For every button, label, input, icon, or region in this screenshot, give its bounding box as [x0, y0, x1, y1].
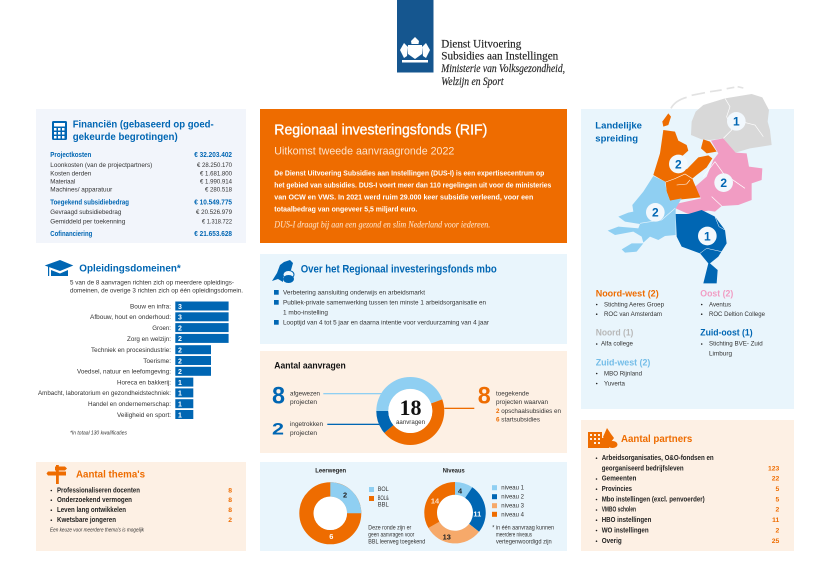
heading: Opleidingsdomeinen*	[79, 263, 182, 275]
region list: zuid-west	[596, 357, 650, 387]
chart: leerwegen: Leerwegen	[315, 468, 346, 475]
partner list: 5	[776, 496, 780, 503]
partner list: georganiseerd bedrijfsleven	[602, 465, 684, 472]
finance table: € 20.526.979	[196, 209, 232, 216]
donut chart: aanvragen: 18	[400, 395, 422, 420]
bullet list: 1 mbo-instelling	[283, 309, 328, 316]
note: niveaus: * in één aanvraag kunnen	[492, 525, 554, 532]
icon: calculator	[52, 121, 67, 140]
callout: ingetrokken: 2	[272, 419, 284, 438]
theme list: Professionaliseren docenten	[57, 487, 140, 494]
bar chart: Voedsel, natuur en leefomgeving:	[77, 368, 171, 376]
organisation name: Dienst Uitvoering	[441, 38, 522, 50]
callout: toegekend: toegekende	[496, 390, 529, 397]
finance table	[50, 152, 232, 238]
panel: over het fonds	[260, 254, 567, 344]
callout: toegekend: 8	[478, 382, 491, 409]
theme list	[50, 487, 232, 524]
heading: spreiding	[595, 134, 638, 145]
callout: afgewezen: projecten	[290, 399, 317, 406]
bar chart: 1	[178, 380, 182, 387]
region: oost	[676, 138, 762, 214]
finance table: Gevraagd subsidiebedrag	[50, 209, 121, 216]
region list: zuid-oost: Zuid-oost (1)	[700, 328, 753, 339]
intro paragraph: De Dienst Uitvoering Subsidies aan Instellingen (DUS-I) is een expertisecentrum op	[274, 169, 545, 178]
callout: afgewezen	[272, 382, 383, 409]
finance table: € 1.990.914	[200, 178, 232, 185]
chart: niveaus: Niveaus	[443, 468, 465, 475]
chart: niveaus: 14	[431, 496, 440, 505]
legend: niveaus: niveau 1	[501, 485, 524, 492]
intro paragraph: van OCW en VWS. In 2021 werd ruim 29.000 keer subsidie verleend, voor een	[274, 192, 533, 201]
donut chart: aanvragen	[376, 377, 444, 445]
partner list: 2	[776, 527, 780, 534]
bar chart: 3	[178, 315, 182, 322]
region list: zuid-west: Zuid-west (2)	[596, 357, 650, 368]
bar chart: 1	[178, 402, 182, 408]
region list: zuid-west: Yuverta	[604, 380, 625, 387]
chart: leerwegen	[306, 468, 361, 541]
finance table: € 21.653.628	[194, 231, 232, 238]
heading	[73, 120, 214, 143]
map number badges: 2	[720, 176, 727, 190]
region: noord	[691, 94, 772, 153]
partner list	[596, 455, 780, 545]
region list: noord: Noord (1)	[596, 328, 633, 339]
finance table: € 10.549.775	[194, 199, 232, 206]
note: leerwegen: BBL leerweg toegekend	[368, 539, 426, 546]
finance table: € 28.250.170	[197, 162, 232, 169]
partner list: Arbeidsorganisaties, O&O-fondsen en	[602, 455, 714, 462]
region list: oost	[700, 289, 765, 318]
region: noord-west	[653, 113, 717, 201]
callout: ingetrokken	[272, 419, 379, 438]
map number badges: 1	[704, 229, 711, 243]
bar chart: 2	[178, 358, 182, 365]
heading: Financiën (gebaseerd op goed-	[73, 120, 214, 131]
finance table: Materiaal	[50, 178, 76, 185]
region list: zuid-oost	[700, 328, 763, 358]
bar chart: 2	[178, 348, 182, 354]
bar chart: Techniek en procesindustrie:	[91, 347, 171, 354]
bar chart: 1	[178, 391, 182, 398]
callout: ingetrokken: ingetrokken	[290, 421, 323, 428]
note: niveaus: meerdere niveaus	[496, 532, 532, 538]
bar chart: Bouw en infra:	[130, 304, 171, 310]
panel: landelijke spreiding	[581, 87, 794, 409]
theme list: Leven lang ontwikkelen	[57, 507, 126, 514]
legend: niveaus: niveau 3	[501, 503, 524, 510]
callout: afgewezen: 8	[272, 382, 285, 409]
partner list: 25	[772, 538, 780, 545]
finance table: Gemiddeld per toekenning	[50, 219, 126, 226]
legend: leerwegen: BOL	[378, 486, 389, 493]
wadden islands	[671, 87, 743, 108]
legend: niveaus: niveau 2	[501, 494, 524, 501]
legend: niveaus	[492, 485, 524, 518]
note: niveaus: vertegenwoordigd zijn	[496, 538, 552, 545]
heading: Landelijke	[595, 121, 642, 132]
chart: leerwegen: 6	[329, 532, 333, 541]
chart: niveaus: 13	[443, 532, 451, 541]
bar chart: 2	[178, 369, 182, 376]
finance table: Projectkosten	[50, 152, 91, 159]
heading: Aantal aanvragen	[274, 360, 346, 370]
map number badges: 1	[733, 115, 740, 129]
intro text: domeinen, de overige 3 richten zich op één opleidingsdomein.	[70, 288, 243, 295]
bar chart: Zorg en welzijn:	[127, 336, 171, 343]
finance table: € 1.318.722	[202, 219, 232, 226]
intro text: 5 van de 8 aanvragen richten zich op meerdere opleidings-	[70, 279, 234, 286]
finance table: Machines/ apparatuur	[50, 187, 113, 194]
region list: zuid-oost: Stichting BVE- Zuid	[709, 341, 763, 348]
finance table: € 280.518	[205, 187, 232, 194]
heading: gekeurde begrotingen)	[73, 132, 178, 143]
partner list: Gemeenten	[602, 476, 636, 483]
theme list: Kwetsbare jongeren	[57, 517, 116, 524]
header logo	[397, 0, 565, 88]
panel: aantal aanvragen	[260, 351, 567, 453]
partner list: 123	[768, 465, 780, 472]
organisation name	[440, 38, 565, 88]
icon: signpost	[46, 465, 67, 484]
partner list: Overig	[602, 538, 622, 545]
map number badges: 2	[652, 206, 659, 220]
region list: oost: ROC Deltion College	[709, 311, 765, 318]
chart: niveaus: 4	[458, 486, 463, 495]
callout: ingetrokken: projecten	[290, 430, 317, 437]
callout: afgewezen: afgewezen	[290, 391, 320, 398]
bar chart: Handel en ondernemerschap:	[88, 401, 171, 408]
bar chart: Groen:	[152, 325, 171, 332]
region: zuid-west	[608, 176, 682, 253]
panel: aantal themas	[36, 462, 246, 551]
region list: noord-west: ROC van Amsterdam	[604, 311, 662, 318]
bar chart	[38, 302, 229, 419]
finance table: Kosten derden	[50, 170, 91, 177]
bullet list: Verbetering aansluiting onderwijs en arbeidsmarkt	[283, 289, 425, 296]
bar chart: Veiligheid en sport:	[117, 412, 171, 419]
panel: leerwegen en niveaus	[260, 462, 567, 551]
intro text	[70, 279, 243, 295]
map number badges: 2	[675, 157, 682, 171]
icon: netherlands with coins	[272, 260, 294, 283]
region list: oost: Oost (2)	[700, 289, 733, 300]
legend: leerwegen: BOL&	[378, 495, 389, 502]
finance table: € 32.203.402	[194, 152, 232, 159]
finance table: Cofinanciering	[50, 231, 92, 238]
bar chart: Afbouw, hout en onderhoud:	[90, 314, 171, 321]
coat of arms	[400, 37, 430, 62]
chart: niveaus	[424, 468, 486, 543]
theme list: Onderzoekend vermogen	[57, 497, 132, 504]
region list: noord-west	[596, 289, 664, 318]
note: leerwegen	[368, 524, 426, 546]
intro paragraph: het gebied van subsidies. DUS-I voert meer dan 110 regelingen uit voor de ministeries	[274, 181, 551, 190]
title: Regionaal investeringsfonds (RIF)	[274, 122, 487, 138]
intro paragraph	[274, 169, 551, 213]
region list: zuid-oost: Limburg	[709, 351, 732, 358]
callout: toegekend: projecten waarvan	[496, 399, 548, 406]
heading: Aantal partners	[621, 433, 692, 445]
bar chart: 3	[178, 304, 182, 311]
subtitle: Uitkomst tweede aanvraagronde 2022	[274, 145, 454, 157]
partner list: 2	[776, 507, 780, 514]
theme list: 8	[228, 487, 232, 494]
finance table: € 1.681.800	[200, 170, 232, 177]
partner list: Provincies	[602, 486, 632, 493]
bar chart: 2	[178, 336, 182, 343]
bullet list: Publiek-private samenwerking tussen ten minste 1 arbeidsorganisatie en	[283, 299, 486, 306]
organisation name: Welzijn en Sport	[441, 76, 504, 88]
bullet list: Looptijd van 4 tot 5 jaar en daarna intentie voor verduurzaming van 4 jaar	[283, 319, 490, 326]
callout: toegekend: 6 startsubsidies	[496, 417, 541, 424]
note: leerwegen: geen aanvragen voor	[368, 531, 414, 538]
chart: niveaus: 11	[473, 510, 481, 518]
italic statement: DUS-I draagt bij aan een gezond en slim Nederland voor iedereen.	[273, 219, 490, 230]
heading: Over het Regionaal investeringsfonds mbo	[301, 264, 497, 276]
donut chart: aanvragen: aanvragen	[396, 419, 425, 426]
partner list: HBO instellingen	[602, 517, 651, 524]
note: Een keuze voor meerdere thema's is mogelijk	[50, 527, 145, 533]
note: niveaus	[492, 525, 554, 545]
partner list: 22	[772, 476, 780, 483]
partner list: WO instellingen	[602, 527, 649, 534]
region list: noord-west: Noord-west (2)	[596, 289, 659, 300]
partner list: VMBO scholen	[602, 507, 636, 514]
bar chart: 2	[178, 325, 182, 332]
logo ribbon	[397, 0, 434, 72]
bar chart: Ambacht, laboratorium en gezondheidstechniek:	[38, 390, 171, 397]
intro paragraph: totaalbedrag van ongeveer 5,5 miljard euro.	[274, 204, 417, 213]
partner list: Mbo instellingen (excl. penvoerder)	[602, 496, 705, 503]
region list: noord-west: Stichting Aeres Groep	[604, 301, 664, 308]
footnote: *In totaal 130 kwalificaties	[70, 430, 127, 436]
region list: zuid-west: MBO Rijnland	[604, 370, 642, 377]
legend: niveaus: niveau 4	[501, 511, 524, 518]
bar chart: Horeca en bakkerij:	[117, 380, 171, 386]
panel: opleidingsdomeinen	[38, 260, 243, 436]
theme list: 2	[228, 517, 232, 524]
panel: financien	[36, 109, 246, 243]
chart: leerwegen: 2	[343, 490, 347, 500]
theme list: 8	[228, 497, 232, 504]
legend: leerwegen	[369, 486, 389, 509]
callout: toegekend: 2 opschaalsubsidies en	[496, 408, 561, 415]
icon: graduation cap	[45, 260, 73, 276]
heading	[595, 121, 642, 145]
region list: oost: Aventus	[709, 301, 732, 308]
bullet list	[274, 289, 490, 326]
partner list: 5	[776, 486, 780, 493]
finance table: Toegekend subsidiebedrag	[50, 199, 129, 206]
panel: intro	[260, 109, 567, 243]
bar chart: Toerisme:	[143, 358, 171, 365]
organisation name: Ministerie van Volksgezondheid,	[440, 63, 565, 75]
bar chart: 1	[178, 412, 182, 419]
heading: Aantal thema's	[76, 468, 145, 480]
theme list: 8	[228, 507, 232, 514]
organisation name: Subsidies aan Instellingen	[441, 51, 559, 63]
callout: toegekend	[444, 382, 561, 424]
map of the netherlands	[608, 87, 772, 283]
region: zuid-oost	[676, 210, 727, 283]
map number badges	[646, 112, 746, 245]
region list: noord: Alfa college	[601, 341, 633, 348]
panel: aantal partners	[581, 420, 794, 551]
region list: noord	[596, 328, 633, 348]
note: leerwegen: Deze ronde zijn er	[368, 524, 411, 531]
icon: buildings, tree and coins	[588, 428, 618, 448]
finance table: Loonkosten (van de projectpartners)	[50, 162, 152, 169]
partner list: 11	[772, 517, 780, 524]
legend: leerwegen: BBL	[378, 502, 389, 509]
